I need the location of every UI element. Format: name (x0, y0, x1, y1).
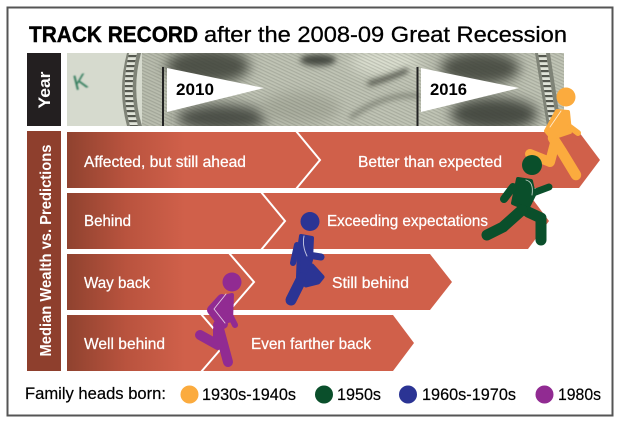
flag: 2016 (416, 67, 519, 126)
flag: 2010: 2010 (176, 80, 214, 99)
title: TRACK RECORD (29, 22, 198, 47)
row 3 arrow: Way back (84, 275, 151, 292)
row 4 arrow: Well behind (84, 336, 165, 353)
legend: 1930s-1940s (202, 385, 296, 404)
legend: Family heads born: (25, 384, 166, 403)
runner: 1980s purple (200, 272, 242, 362)
row 1 arrow (67, 131, 600, 189)
row 2 arrow: Exceeding expectations (327, 213, 488, 230)
title (29, 22, 567, 47)
row 2 arrow (67, 192, 549, 250)
banknote photo background: K (71, 70, 90, 95)
flag: 2010 (162, 67, 264, 126)
title: after the 2008-09 Great Recession (204, 22, 567, 47)
row 2 arrow: Behind (84, 213, 131, 230)
legend: 1960s-1970s (422, 385, 516, 404)
year label box: Year (35, 71, 54, 108)
flag: 2016: 2016 (430, 80, 467, 99)
median wealth label box: Median Wealth vs. Predictions (38, 144, 55, 356)
legend: 1980s (558, 385, 601, 404)
row 3 arrow (67, 253, 452, 311)
row 4 arrow: Even farther back (251, 336, 372, 353)
runner: 1960s-1970s blue (291, 212, 322, 300)
runner: 1950s green (487, 155, 549, 240)
row 4 arrow (67, 314, 414, 372)
row 1 arrow: Better than expected (358, 154, 502, 171)
banknote photo background (67, 53, 564, 126)
runner: 1930s-1940s orange (530, 88, 578, 175)
year label box (27, 53, 61, 126)
row 1 arrow: Affected, but still ahead (84, 154, 246, 171)
legend (25, 384, 601, 404)
median wealth label box (27, 131, 61, 371)
legend: 1950s (337, 385, 381, 404)
row 3 arrow: Still behind (332, 275, 409, 292)
